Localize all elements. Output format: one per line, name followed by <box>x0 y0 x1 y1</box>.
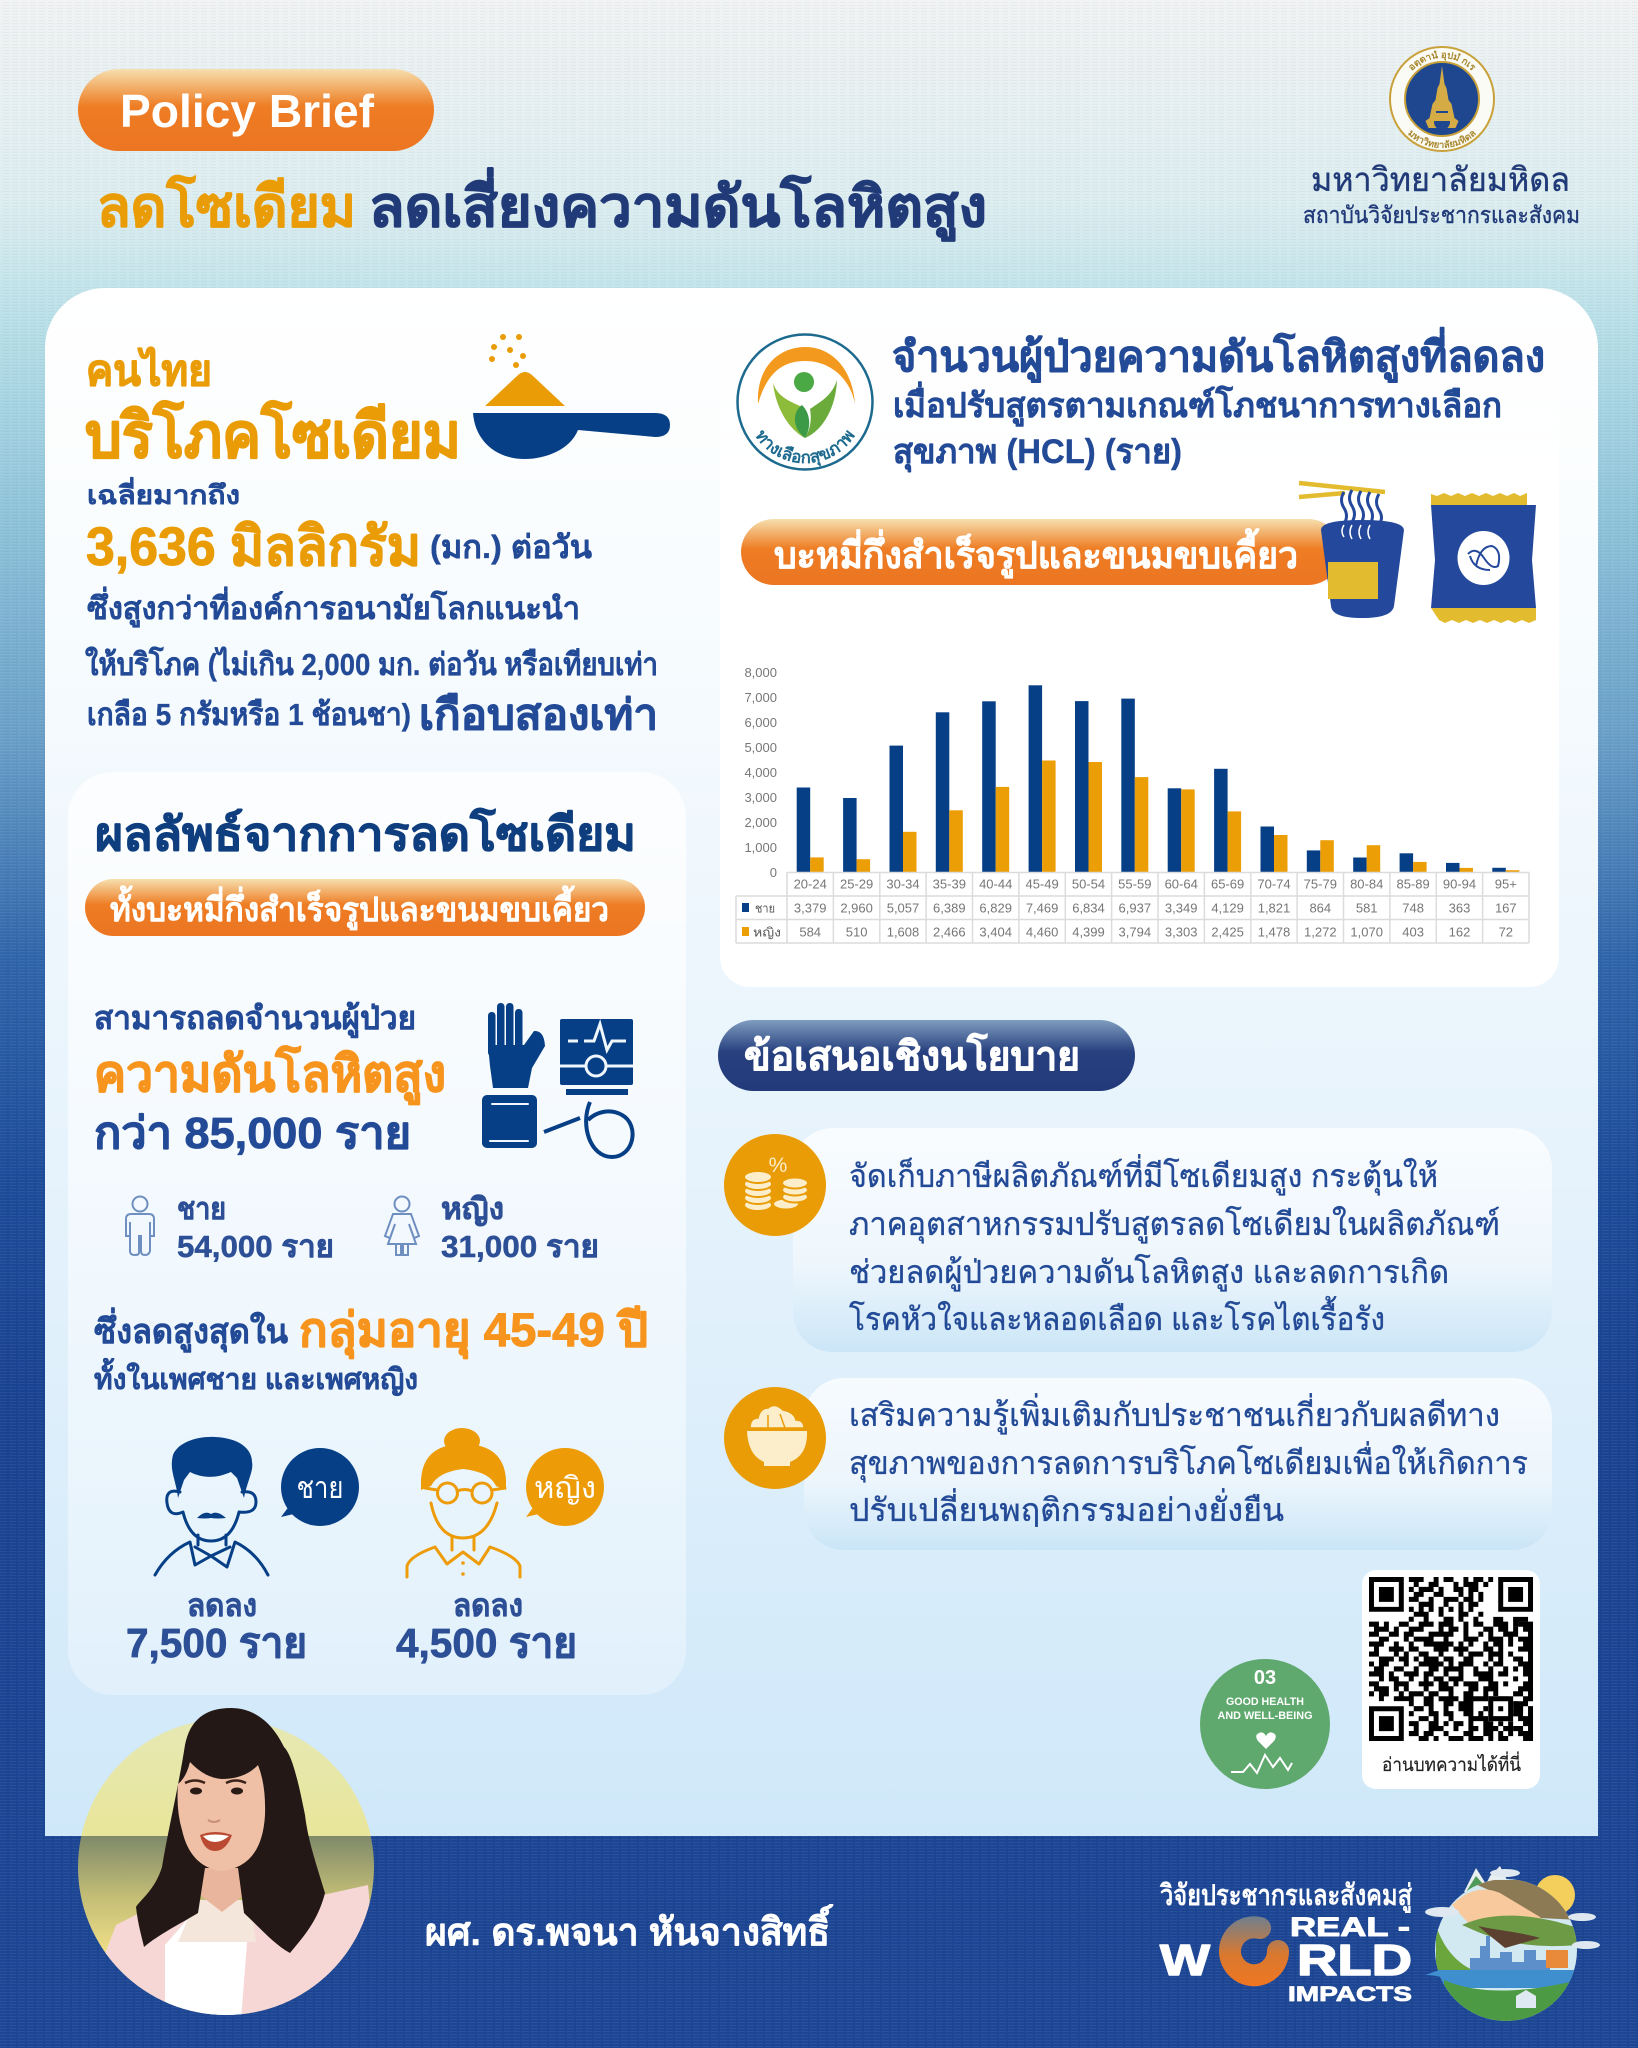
table: male values: 864 <box>1309 900 1331 916</box>
text: WHO comparison: เกลือ 5 กรัมหรือ 1 ช้อนชา) <box>87 697 411 732</box>
y-axis labels <box>744 665 777 880</box>
heading: Thai people consume sodium <box>85 346 461 471</box>
table: male values: 4,129 <box>1211 900 1244 916</box>
logo: real-world impacts <box>1159 1880 1412 2006</box>
icon: man avatar <box>155 1437 268 1575</box>
icon: coins with percent: % <box>769 1154 787 1177</box>
speech bubble: male <box>281 1448 359 1526</box>
illustration: globe <box>1425 1866 1600 2025</box>
table: male values: 3,349 <box>1165 900 1197 916</box>
bar chart <box>736 665 1529 943</box>
table: male values: 6,937 <box>1119 900 1151 916</box>
logo: real-world impacts: REAL - <box>1290 1912 1410 1942</box>
subheading pill: ทั้งบะหมี่กึ่งสำเร็จรูปและขนมขบเคี้ยว <box>110 885 609 931</box>
text: WHO comparison: ซึ่งสูงกว่าที่องค์การอนามัยโลกแนะนำ <box>87 586 580 628</box>
table: male values: 3,379 <box>794 900 826 916</box>
text: recommendation 1: ภาคอุตสาหกรรมปรับสูตรลดโซเดียมในผลิตภัณฑ์ <box>849 1206 1500 1244</box>
heading: Thai people consume sodium: บริโภคโซเดียม <box>85 399 461 471</box>
y-axis labels: 1,000 <box>744 840 777 855</box>
table: age groups: 65-69 <box>1211 876 1244 892</box>
section: sodium intake <box>85 334 670 738</box>
text: female reduction: ลดลง <box>453 1588 523 1623</box>
table: male values <box>742 900 1517 916</box>
y-axis labels: 0 <box>770 865 777 880</box>
table: female values: 1,070 <box>1350 924 1383 940</box>
text: female count: หญิง <box>441 1193 504 1227</box>
text: highest reduction age group: ซึ่งลดสูงสุดใน <box>94 1307 288 1353</box>
card: recommendation 2 <box>724 1378 1552 1550</box>
portrait: author photo <box>78 1708 380 2020</box>
badge: SDG 3: AND WELL-BEING <box>1218 1710 1312 1722</box>
heading pill: policy recommendations <box>718 1020 1135 1091</box>
speech bubble: female <box>526 1448 604 1526</box>
table: age groups: 35-39 <box>933 876 966 892</box>
table: female values: 3,404 <box>979 924 1012 940</box>
panel: main content <box>45 288 1598 1836</box>
y-axis labels: 2,000 <box>744 815 777 830</box>
table: age groups: 30-34 <box>886 876 920 892</box>
table: female values: 4,399 <box>1072 924 1105 940</box>
table: female values: 3,794 <box>1119 924 1151 940</box>
table: female values: 72 <box>1499 924 1513 940</box>
bars: male <box>797 685 1506 872</box>
logo: real-world impacts: W <box>1160 1936 1211 1985</box>
table: age groups: 80-84 <box>1350 876 1383 892</box>
main title <box>97 167 987 242</box>
main title: ลดเสี่ยงความดันโลหิตสูง <box>369 167 987 242</box>
text: WHO comparison <box>85 586 658 738</box>
speech bubble: male: ชาย <box>296 1472 344 1505</box>
table: female values: 3,303 <box>1165 924 1197 940</box>
text: recommendation 1: โรคหัวใจและหลอดเลือด และโรคไตเรื้อรัง <box>849 1296 1385 1337</box>
table: female values: หญิง <box>753 926 781 940</box>
text: recommendation 1 <box>849 1154 1500 1337</box>
speech bubble: female: หญิง <box>534 1472 596 1505</box>
heading: chart title <box>892 327 1545 473</box>
text: male count: ชาย <box>177 1193 226 1226</box>
statistic: over 85,000 patients: กว่า 85,000 ราย <box>94 1109 411 1158</box>
university name: มหาวิทยาลัยมหิดล <box>1311 161 1570 198</box>
heading: chart title: เมื่อปรับสูตรตามเกณฑ์โภชนาการทางเลือก <box>893 381 1502 427</box>
table: female values: 584 <box>799 924 821 940</box>
panel: results of sodium reduction <box>68 772 686 1695</box>
logo: Mahidol University seal <box>1389 46 1495 152</box>
heading: results: ผลลัพธ์จากการลดโซเดียม <box>95 807 636 860</box>
y-axis labels: 3,000 <box>744 790 777 805</box>
table: age groups: 45-49 <box>1025 876 1059 892</box>
logo: Mahidol University seal: มหาวิทยาลัยมหิดล <box>1408 130 1476 148</box>
table: male values: 748 <box>1402 900 1424 916</box>
author name: ผศ. ดร.พจนา หันจางสิทธิ์ <box>425 1904 834 1954</box>
table: male values: ชาย <box>755 902 775 916</box>
table: female values: 2,466 <box>933 924 966 940</box>
logo: real-world impacts: วิจัยประชากรและสังคมสู่ <box>1159 1880 1412 1913</box>
policy brief pill: Policy Brief <box>120 85 375 137</box>
category pill: บะหมี่กึ่งสำเร็จรูปและขนมขบเคี้ยว <box>774 528 1298 579</box>
text: average: เฉลี่ยมากถึง <box>87 476 240 510</box>
table: age groups: 60-64 <box>1165 876 1198 892</box>
text: female reduction: 4,500 ราย <box>396 1620 577 1666</box>
table: female values <box>742 924 1513 940</box>
text: female count: 31,000 ราย <box>441 1229 599 1264</box>
university name <box>1303 161 1580 228</box>
table: age groups: 50-54 <box>1072 876 1105 892</box>
table: age groups: 95+ <box>1495 876 1517 892</box>
badge: SDG 3 <box>1200 1659 1330 1789</box>
heading pill: policy recommendations: ข้อเสนอเชิงนโยบาย <box>744 1033 1080 1079</box>
panel: chart card <box>720 326 1559 987</box>
text: recommendation 2: เสริมความรู้เพิ่มเติมกับประชาชนเกี่ยวกับผลดีทาง <box>849 1393 1500 1435</box>
table: male values: 363 <box>1449 900 1470 916</box>
icon: coins with percent <box>724 1134 826 1236</box>
table: female values: 510 <box>846 924 867 940</box>
bars: female <box>810 760 1519 872</box>
text: male count <box>177 1193 334 1264</box>
text: male count: 54,000 ราย <box>177 1229 334 1264</box>
table: age groups: 70-74 <box>1257 876 1291 892</box>
logo: Mahidol University seal: อตฺตานํ อุปมํ กเร <box>1409 50 1476 71</box>
logo: healthier choice <box>736 333 874 471</box>
QR code <box>1367 1575 1535 1743</box>
table: male values: 2,960 <box>840 900 873 916</box>
y-axis labels: 8,000 <box>744 665 777 680</box>
text: male reduction: ลดลง <box>187 1588 257 1623</box>
badge: SDG 3: 03 <box>1254 1667 1276 1689</box>
university name: สถาบันวิจัยประชากรและสังคม <box>1303 202 1580 228</box>
main title: ลดโซเดียม <box>97 174 356 238</box>
statistic: over 85,000 patients <box>94 1000 446 1158</box>
y-axis labels: 6,000 <box>744 715 777 730</box>
y-axis labels: 5,000 <box>744 740 777 755</box>
caption: read article here: อ่านบทความได้ที่นี่ <box>1382 1751 1521 1776</box>
table: female values: 162 <box>1449 924 1470 940</box>
statistic: 3,636 mg per day: 3,636 มิลลิกรัม <box>86 517 421 577</box>
statistic: 3,636 mg per day: (มก.) ต่อวัน <box>430 529 592 565</box>
icon: snack bag <box>1431 493 1536 623</box>
QR code card <box>1362 1570 1540 1789</box>
text: recommendation 2: สุขภาพของการลดการบริโภคโซเดียมเพื่อให้เกิดการ <box>849 1441 1528 1483</box>
subheading pill <box>85 879 645 936</box>
text: recommendation 2 <box>849 1393 1528 1528</box>
table: age groups: 20-24 <box>794 876 827 892</box>
heading: chart title: สุขภาพ (HCL) (ราย) <box>893 433 1182 473</box>
text: recommendation 2: ปรับเปลี่ยนพฤติกรรมอย่างยั่งยืน <box>849 1488 1284 1528</box>
table: male values: 6,829 <box>979 900 1012 916</box>
text: WHO comparison: ให้บริโภค (ไม่เกิน 2,000 มก. ต่อวัน หรือเทียบเท่า <box>85 646 658 682</box>
table: female values: 1,272 <box>1304 924 1337 940</box>
table: male values: 7,469 <box>1026 900 1058 916</box>
policy brief pill <box>78 69 434 151</box>
table: age groups: 90-94 <box>1443 876 1476 892</box>
card: recommendation 1 <box>724 1128 1552 1352</box>
table: female values: 4,460 <box>1026 924 1058 940</box>
category pill <box>741 519 1341 585</box>
table: female values: 2,425 <box>1211 924 1244 940</box>
text: male reduction: 7,500 ราย <box>126 1620 307 1666</box>
icon: woman avatar <box>407 1428 520 1577</box>
table: age groups: 85-89 <box>1396 876 1430 892</box>
icon: male figure <box>126 1196 154 1255</box>
table: female values: 1,608 <box>887 924 919 940</box>
logo: healthier choice: ทางเลือกสุขภาพ <box>756 430 856 466</box>
logo: real-world impacts: IMPACTS <box>1288 1983 1412 2006</box>
text: WHO comparison: เกือบสองเท่า <box>419 691 658 738</box>
icon: blood pressure monitor <box>482 1003 633 1157</box>
text: highest reduction age group: ทั้งในเพศชาย และเพศหญิง <box>94 1357 418 1397</box>
badge: SDG 3: GOOD HEALTH <box>1226 1696 1304 1708</box>
table: age groups: 75-79 <box>1304 876 1337 892</box>
statistic: over 85,000 patients: สามารถลดจำนวนผู้ป่วย <box>94 1000 416 1039</box>
heading: chart title: จำนวนผู้ป่วยความดันโลหิตสูงที่ลดลง <box>892 327 1545 383</box>
table: female values: 403 <box>1402 924 1424 940</box>
text: male reduction <box>126 1588 307 1666</box>
text: highest reduction age group: กลุ่มอายุ 45-49 ปี <box>299 1303 648 1359</box>
y-axis labels: 7,000 <box>744 690 777 705</box>
icon: salt scoop <box>473 334 670 459</box>
statistic: over 85,000 patients: ความดันโลหิตสูง <box>94 1044 446 1105</box>
table: male values: 1,821 <box>1258 900 1290 916</box>
table: male values: 6,389 <box>933 900 966 916</box>
icon: food bowl <box>724 1387 826 1489</box>
icon: female figure <box>385 1196 419 1255</box>
table: male values: 5,057 <box>887 900 919 916</box>
table: age groups: 25-29 <box>840 876 873 892</box>
statistic: 3,636 mg per day <box>86 517 592 577</box>
table: male values: 167 <box>1495 900 1517 916</box>
text: highest reduction age group <box>94 1303 648 1397</box>
text: female count <box>441 1193 599 1264</box>
text: recommendation 1: จัดเก็บภาษีผลิตภัณฑ์ที่มีโซเดียมสูง กระตุ้นให้ <box>849 1154 1438 1196</box>
table: female values: 1,478 <box>1258 924 1290 940</box>
icon: instant noodle cup <box>1299 483 1404 618</box>
table: male values: 6,834 <box>1072 900 1105 916</box>
text: recommendation 1: ช่วยลดผู้ป่วยความดันโลหิตสูง และลดการเกิด <box>849 1254 1449 1292</box>
table: male values: 581 <box>1356 900 1378 916</box>
text: female reduction <box>396 1588 577 1666</box>
table: age groups: 40-44 <box>979 876 1012 892</box>
table: age groups: 55-59 <box>1118 876 1151 892</box>
y-axis labels: 4,000 <box>744 765 777 780</box>
table: age groups <box>794 876 1517 892</box>
logo: real-world impacts: RLD <box>1297 1936 1412 1985</box>
heading: Thai people consume sodium: คนไทย <box>86 346 212 394</box>
